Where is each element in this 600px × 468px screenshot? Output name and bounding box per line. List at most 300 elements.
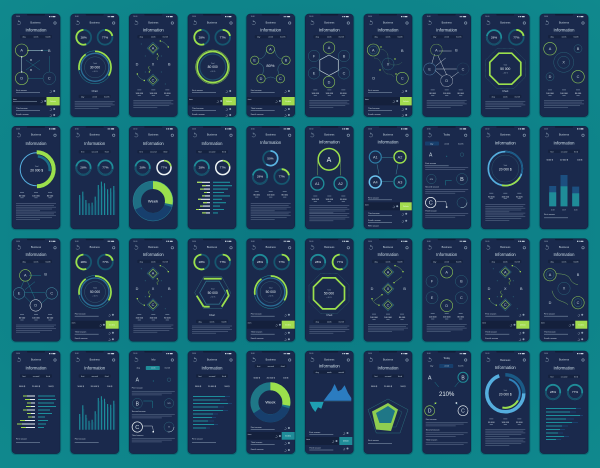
rings: 28%	[257, 175, 263, 179]
swipe list: Fourth season	[251, 337, 263, 340]
swipe list: First season	[309, 431, 320, 434]
phone 21: five-node network: 80 000	[19, 318, 26, 320]
diamond diagram	[136, 40, 171, 86]
phone 15: three rings: Information	[260, 140, 282, 145]
phone 14: rings and diverging bars: Business	[207, 134, 218, 137]
phone 10: X network: Business	[559, 21, 570, 24]
phone 18: today sections: Today	[443, 134, 451, 137]
phone 10: X network: 10:00	[544, 16, 548, 18]
phone 29: diamond network with list	[480, 238, 530, 343]
phone 15: three rings: 80 000	[254, 195, 261, 197]
phone 29: diamond network with list: 10:00	[485, 241, 489, 243]
phone 8: five-node network: 10:00	[427, 16, 431, 18]
phone 16: A hierarchy	[304, 126, 354, 230]
star diagram: E	[253, 59, 256, 63]
rings: 77%	[279, 175, 285, 179]
phone 34: stats and horizontal bars: 20 000 $	[208, 386, 217, 388]
ring gauge: 30 000	[90, 66, 100, 70]
phone 32: stats and bar chart: third	[105, 375, 109, 378]
phone 32: stats and bar chart: First season	[75, 438, 86, 440]
radar chart	[368, 399, 408, 433]
hexagon gauge: Total	[211, 288, 215, 291]
swipe list: Third season	[251, 332, 262, 334]
section C	[132, 422, 175, 442]
phone 8: five-node network: 80 000	[458, 93, 465, 95]
phone 6: hexagon network: week	[327, 37, 332, 39]
phone 5: star network: Business	[266, 21, 277, 24]
ring gauge	[196, 50, 230, 84]
phone 27: diamond grid	[363, 238, 413, 343]
phone 13: rings and donut: second	[150, 152, 157, 154]
phone 36: area chart with list: Business	[324, 358, 335, 361]
phone 30: X network with list	[539, 238, 589, 343]
phone 21: five-node network: Information	[26, 252, 47, 257]
octagon gauge: + 60 %	[503, 73, 508, 75]
phone 8: five-node network: Business	[442, 21, 453, 24]
phone 19: blue ring	[480, 126, 530, 230]
diamond diagram	[136, 265, 171, 311]
diamond diagram	[371, 265, 406, 311]
diamond diagram: X	[152, 63, 155, 67]
phone 39: layered ring: Information	[495, 365, 516, 370]
phone 21: five-node network: day	[22, 261, 26, 263]
ring chart	[485, 373, 525, 413]
phone 5: star network: month	[280, 36, 285, 39]
network diagram: C	[401, 77, 404, 81]
phone 10: X network: day	[550, 37, 554, 39]
swipe list: item	[541, 322, 545, 325]
phone 28: six-node ring network: week	[444, 261, 449, 263]
network diagram: A	[549, 47, 552, 51]
diamond diagram: B	[168, 287, 171, 291]
ring gauge: 50 000	[90, 290, 100, 294]
phone 3: diamond network: Information	[143, 28, 164, 32]
phone 20: stacked bars	[539, 126, 589, 230]
hierarchy diagram: A1	[315, 182, 320, 186]
phone 40: rings and horizontal bars: Information	[554, 366, 575, 370]
phone 19: blue ring: 80 000	[516, 196, 523, 198]
hexagon gauge: 50 000	[208, 291, 218, 295]
phone 39: layered ring: 100 000	[502, 422, 510, 424]
diamond diagram: D	[136, 63, 139, 67]
phone 20: stacked bars: second	[561, 151, 567, 153]
swipe list	[247, 89, 295, 117]
phone 37: radar chart: 100 $	[400, 386, 406, 388]
phone 12: rings and bar chart: Information	[84, 141, 106, 146]
section B	[132, 398, 175, 418]
phone 24: hexagon gauge: week	[210, 321, 214, 323]
phone 10: X network: month	[573, 36, 579, 39]
diamond diagram: C	[504, 303, 507, 307]
phone 28: six-node ring network	[422, 238, 472, 343]
phone 18: today sections	[422, 126, 472, 230]
phone 16: A hierarchy: 100 000	[312, 199, 320, 201]
phone 40: rings and horizontal bars: third	[574, 375, 578, 378]
ring gauge: 80 000	[208, 65, 218, 69]
phone 20: stacked bars: third	[574, 150, 578, 153]
network diagram: C	[461, 409, 465, 415]
phone 24: hexagon gauge: 10:00	[192, 241, 196, 243]
ring gauge: Total	[93, 62, 97, 65]
phone 31: stats and diverging bars: second	[33, 376, 39, 378]
phone 37: radar chart: 20 000 $	[384, 386, 393, 388]
phone 6: hexagon network: Information	[319, 28, 340, 32]
rings: 77%	[279, 260, 285, 264]
phone 3: diamond network: week	[151, 37, 156, 39]
phone 40: rings and horizontal bars: Business	[559, 359, 570, 362]
phone 28: six-node ring network: 100 000	[443, 316, 451, 318]
swipe list	[364, 89, 412, 117]
phone 24: hexagon gauge	[187, 238, 237, 343]
ring chart: Total	[504, 164, 508, 167]
swipe list: Third season	[16, 108, 28, 110]
section B: 570	[167, 403, 172, 405]
rings: 28%	[81, 260, 87, 264]
swipe list	[188, 89, 236, 117]
phone 13: rings and donut: 10:00	[133, 129, 137, 131]
diamond diagram: C	[152, 78, 155, 82]
phone 38: 210 percent network: day	[430, 366, 433, 368]
phone 13: rings and donut	[128, 126, 178, 230]
rings: 77%	[513, 35, 520, 39]
rings: 77%	[161, 166, 167, 170]
phone 37: radar chart: second	[385, 376, 391, 378]
network diagram: A	[24, 274, 27, 278]
octagon gauge: 50 000	[500, 67, 511, 71]
phone 2: rings with chart	[70, 14, 120, 118]
swipe list: item	[365, 98, 369, 101]
swipe list: Third season	[192, 108, 204, 110]
phone 27: diamond grid: Business	[383, 246, 394, 249]
phone 15: three rings: 100 000	[267, 195, 275, 197]
diamond diagram: X	[152, 287, 155, 291]
rings: 77%	[102, 260, 109, 264]
phone 7: cross network with list: week	[386, 37, 390, 39]
section A: A	[429, 152, 433, 158]
phone 22: rings, gauge and list: Business	[90, 246, 101, 249]
diamond diagram: A	[387, 270, 390, 274]
phone 19: blue ring: 10:00	[485, 129, 489, 131]
rings: 77%	[572, 390, 578, 394]
phone 1: network with swipe list: month	[45, 36, 51, 39]
phone 3: diamond network: month	[163, 36, 168, 39]
phone 20: stacked bars: first	[550, 150, 554, 153]
network diagram: A3	[398, 180, 402, 184]
phone 6: hexagon network: 10:00	[309, 16, 313, 18]
swipe list: item	[248, 98, 252, 101]
diamond diagram: B	[168, 63, 171, 67]
phone 18: today sections: day	[430, 143, 433, 145]
phone 32: stats and bar chart: Information	[84, 366, 106, 370]
network diagram: E	[428, 67, 431, 71]
network diagram: A4	[373, 180, 378, 184]
phone 32: stats and bar chart: second	[91, 376, 98, 378]
swipe list	[12, 89, 60, 117]
phone 36: area chart with list: 10:00	[309, 353, 313, 355]
rings: 77%	[220, 166, 226, 170]
phone 6: hexagon network: month	[339, 36, 344, 39]
phone 37: radar chart: 10:00	[368, 353, 372, 355]
swipe list: First season	[368, 89, 379, 92]
swipe list: Third season	[251, 108, 262, 110]
swipe list: Delete	[578, 323, 585, 326]
octagon gauge: 50 000	[324, 292, 334, 296]
phone 12: rings and bar chart: 10:00	[75, 129, 79, 131]
phone 39: layered ring: 80 000	[516, 422, 523, 424]
phone 34: stats and horizontal bars: Business	[207, 358, 218, 361]
rings: 28%	[199, 35, 205, 39]
phone 1: network with swipe list: Business	[30, 21, 41, 24]
phone 25: rings, gauge and list: 10:00	[251, 241, 255, 243]
section B: 870	[430, 179, 434, 181]
stacked bar chart: 2020	[574, 209, 578, 211]
phone 21: five-node network: 10:00	[16, 241, 20, 243]
phone 23: diamond network: Information	[143, 252, 164, 257]
phone 6: hexagon network: 80 000	[340, 93, 347, 95]
phone 4: ring with list: 10:00	[192, 16, 196, 18]
phone 20: stacked bars: 5000 $	[547, 159, 554, 161]
ring chart: Total	[35, 165, 39, 168]
phone 23: diamond network: 10:00	[133, 241, 137, 243]
phone 36: area chart with list: week	[327, 372, 332, 374]
phone 6: hexagon network: Business	[324, 21, 335, 24]
network diagram: A	[20, 49, 23, 53]
network diagram: A	[435, 48, 438, 52]
phone 19: blue ring: Business	[500, 134, 511, 137]
network diagram: B	[48, 49, 51, 53]
network diagram: D	[445, 79, 448, 83]
rings: 28%	[139, 166, 146, 170]
section A	[132, 378, 175, 395]
swipe list: First season	[251, 313, 262, 316]
swipe list: Delete	[50, 100, 57, 103]
phone 35: donut with list	[246, 351, 296, 455]
phone 23: diamond network: 100 000	[136, 318, 144, 320]
phone 16: A hierarchy: 100 000	[326, 199, 334, 201]
diamond diagram: B	[403, 287, 406, 291]
phone 29: diamond network with list: month	[515, 260, 520, 263]
stacked bar chart	[549, 175, 579, 211]
phone 26: octagon gauge	[304, 238, 354, 343]
swipe list: Fourth season	[192, 113, 205, 116]
rings	[192, 28, 230, 47]
phone 25: rings, gauge and list: Business	[266, 246, 277, 249]
diamond diagram: X	[387, 287, 390, 291]
phone 37: radar chart: Business	[383, 358, 394, 361]
ring chart: 20 000 $	[499, 392, 512, 396]
phone 36: area chart with list: month	[339, 371, 344, 374]
network diagram: A2	[398, 155, 402, 159]
network diagram: B	[461, 375, 465, 381]
phone 39: layered ring: 10:00	[485, 353, 489, 355]
phone 26: octagon gauge: month	[339, 320, 344, 323]
phone 32: stats and bar chart: 5000 $	[78, 386, 85, 388]
ring chart: Total	[504, 389, 508, 392]
ring gauge: Total	[269, 287, 273, 290]
swipe list	[481, 313, 529, 341]
phone 14: rings and diverging bars: 10:00	[192, 129, 196, 131]
section B: B	[460, 177, 464, 183]
phone 37: radar chart	[363, 351, 413, 455]
section A	[425, 152, 468, 170]
phone 12: rings and bar chart: Business	[90, 134, 101, 137]
phone 33: info sections: day	[137, 368, 140, 370]
phone 5: star network: Information	[260, 28, 282, 32]
phone 38: 210 percent network: week	[444, 366, 449, 368]
network diagram: F	[431, 280, 434, 284]
phone 33: info sections: Info	[151, 359, 156, 362]
phone 8: five-node network: 80 000	[430, 93, 437, 95]
network diagram: B	[460, 280, 463, 284]
swipe list	[71, 313, 119, 341]
network diagram	[13, 270, 57, 311]
phone 31: stats and diverging bars: first	[22, 375, 26, 378]
phone 7: cross network with list: Business	[383, 21, 394, 24]
phone 28: six-node ring network: 100 000	[429, 316, 437, 318]
phone 30: X network with list: day	[550, 261, 554, 263]
phone 34: stats and horizontal bars: First season	[192, 438, 203, 440]
phone 39: layered ring: 80 000	[488, 422, 495, 424]
phone 29: diamond network with list: day	[492, 261, 495, 263]
phone 28: six-node ring network: day	[433, 261, 436, 263]
phone 5: star network: week	[268, 37, 273, 39]
network diagram: 210%	[439, 392, 455, 398]
section C: Third season	[425, 210, 437, 212]
network diagram: B	[455, 48, 458, 52]
hierarchy diagram: A2	[338, 182, 343, 186]
swipe list: Fourth season	[368, 219, 381, 222]
phone 16: A hierarchy: Business	[324, 134, 335, 137]
phone 24: hexagon gauge: Business	[207, 246, 218, 249]
hexagon diagram: D	[328, 80, 331, 84]
network diagram: X	[563, 287, 566, 291]
phone 5: star network: 10:00	[251, 16, 255, 18]
rings	[252, 148, 289, 185]
ring 77 percent: 77%	[102, 35, 108, 39]
phone 21: five-node network: 100 000	[32, 318, 41, 320]
phone 24: hexagon gauge: Chart	[209, 314, 215, 317]
rings: 28%	[257, 260, 263, 264]
phone 28: six-node ring network: Business	[442, 246, 453, 249]
bar chart	[80, 396, 115, 430]
phone 27: diamond grid: Information	[378, 252, 399, 257]
phone 11: segmented ring: 80 000	[19, 195, 26, 197]
phone 10: X network: Information	[554, 28, 575, 32]
ring gauge: 50 000	[266, 290, 276, 294]
swipe list: Delete	[285, 323, 292, 326]
rings	[134, 159, 171, 176]
network diagram: B	[577, 47, 580, 51]
ring chart	[20, 152, 54, 186]
section C: B	[168, 427, 170, 429]
swipe list: First season	[251, 89, 262, 92]
phone 31: stats and diverging bars: 5000 $	[19, 386, 26, 388]
network diagram: E	[431, 296, 434, 300]
phone 31: stats and diverging bars: 100 $	[48, 386, 54, 388]
diamond diagram: A	[504, 270, 507, 274]
phone 34: stats and horizontal bars: 5000 $	[195, 386, 202, 388]
rings: 28%	[199, 166, 205, 170]
phone 14: rings and diverging bars: first	[198, 151, 202, 154]
diamond diagram	[488, 265, 523, 311]
stacked bar chart: 2019	[562, 209, 566, 211]
phone 19: blue ring: 80 000	[488, 196, 495, 198]
phone 27: diamond grid: 10:00	[368, 241, 372, 243]
phone 35: donut with list: 10:00	[251, 353, 255, 355]
diamond diagram: B	[520, 287, 523, 291]
phone 39: layered ring: Business	[500, 359, 511, 362]
section A: A	[136, 378, 140, 384]
swipe list: item	[13, 98, 17, 101]
phone 10: X network: 100 000	[560, 93, 569, 95]
phone 2: rings with chart: month	[104, 96, 109, 98]
network diagram: D	[549, 75, 552, 79]
swipe list: Third season	[309, 448, 321, 450]
phone 8: five-node network: week	[444, 37, 449, 39]
hierarchy diagram	[311, 148, 347, 190]
phone 17: A1-A4 network with list	[363, 126, 413, 230]
phone 34: stats and horizontal bars: third	[222, 375, 226, 378]
star diagram: D	[260, 77, 263, 81]
phone 23: diamond network	[128, 238, 178, 343]
rings	[74, 253, 113, 271]
horizontal bars	[193, 396, 232, 428]
phone 7: cross network with list	[363, 14, 413, 118]
section B: Second season	[425, 186, 439, 188]
phone 17: A1-A4 network with list: Information	[378, 139, 399, 144]
diamond diagram: D	[371, 287, 374, 291]
phone 34: stats and horizontal bars	[187, 351, 237, 455]
network diagram: D	[445, 304, 448, 308]
phone 23: diamond network: Business	[148, 246, 159, 249]
phone 32: stats and bar chart: Business	[90, 358, 101, 361]
phone 35: donut with list: second	[267, 366, 274, 368]
swipe list: item	[189, 98, 193, 101]
phone 30: X network with list: Information	[554, 252, 575, 257]
phone 15: three rings: 10:00	[251, 129, 255, 131]
swipe list: Fourth season	[544, 337, 557, 340]
network diagram: C	[50, 292, 53, 296]
network diagram: D	[549, 301, 552, 305]
diamond diagram: A	[152, 47, 155, 51]
network diagram: A	[549, 273, 552, 277]
phone 18: today sections: month	[458, 142, 463, 145]
phone 4: ring with list	[187, 14, 237, 118]
star diagram: C	[279, 77, 282, 81]
section C	[425, 197, 468, 218]
phone 8: five-node network	[422, 14, 472, 118]
octagon gauge	[485, 49, 525, 89]
phone 25: rings, gauge and list	[246, 238, 296, 343]
phone 20: stacked bars: 20 000 $	[560, 159, 569, 161]
rings: 77%	[220, 35, 226, 39]
rings: 77%	[337, 260, 343, 264]
section B: Second season	[132, 411, 146, 413]
swipe list: First season	[368, 196, 379, 199]
diamond diagram: D	[136, 287, 139, 291]
phone 23: diamond network: month	[163, 260, 168, 263]
section C: C	[135, 425, 139, 431]
swipe list: item	[365, 203, 369, 206]
network diagram: C	[462, 67, 465, 71]
phone 2: rings with chart: week	[92, 96, 97, 98]
phone 34: stats and horizontal bars: 100 $	[224, 386, 230, 388]
phone 3: diamond network: 80 000	[164, 93, 171, 95]
phone 21: five-node network: Business	[31, 246, 42, 249]
phone 1: network with swipe list: Information	[26, 28, 47, 32]
phone 35: donut with list: Business	[266, 358, 277, 361]
rings: 28%	[80, 166, 87, 170]
